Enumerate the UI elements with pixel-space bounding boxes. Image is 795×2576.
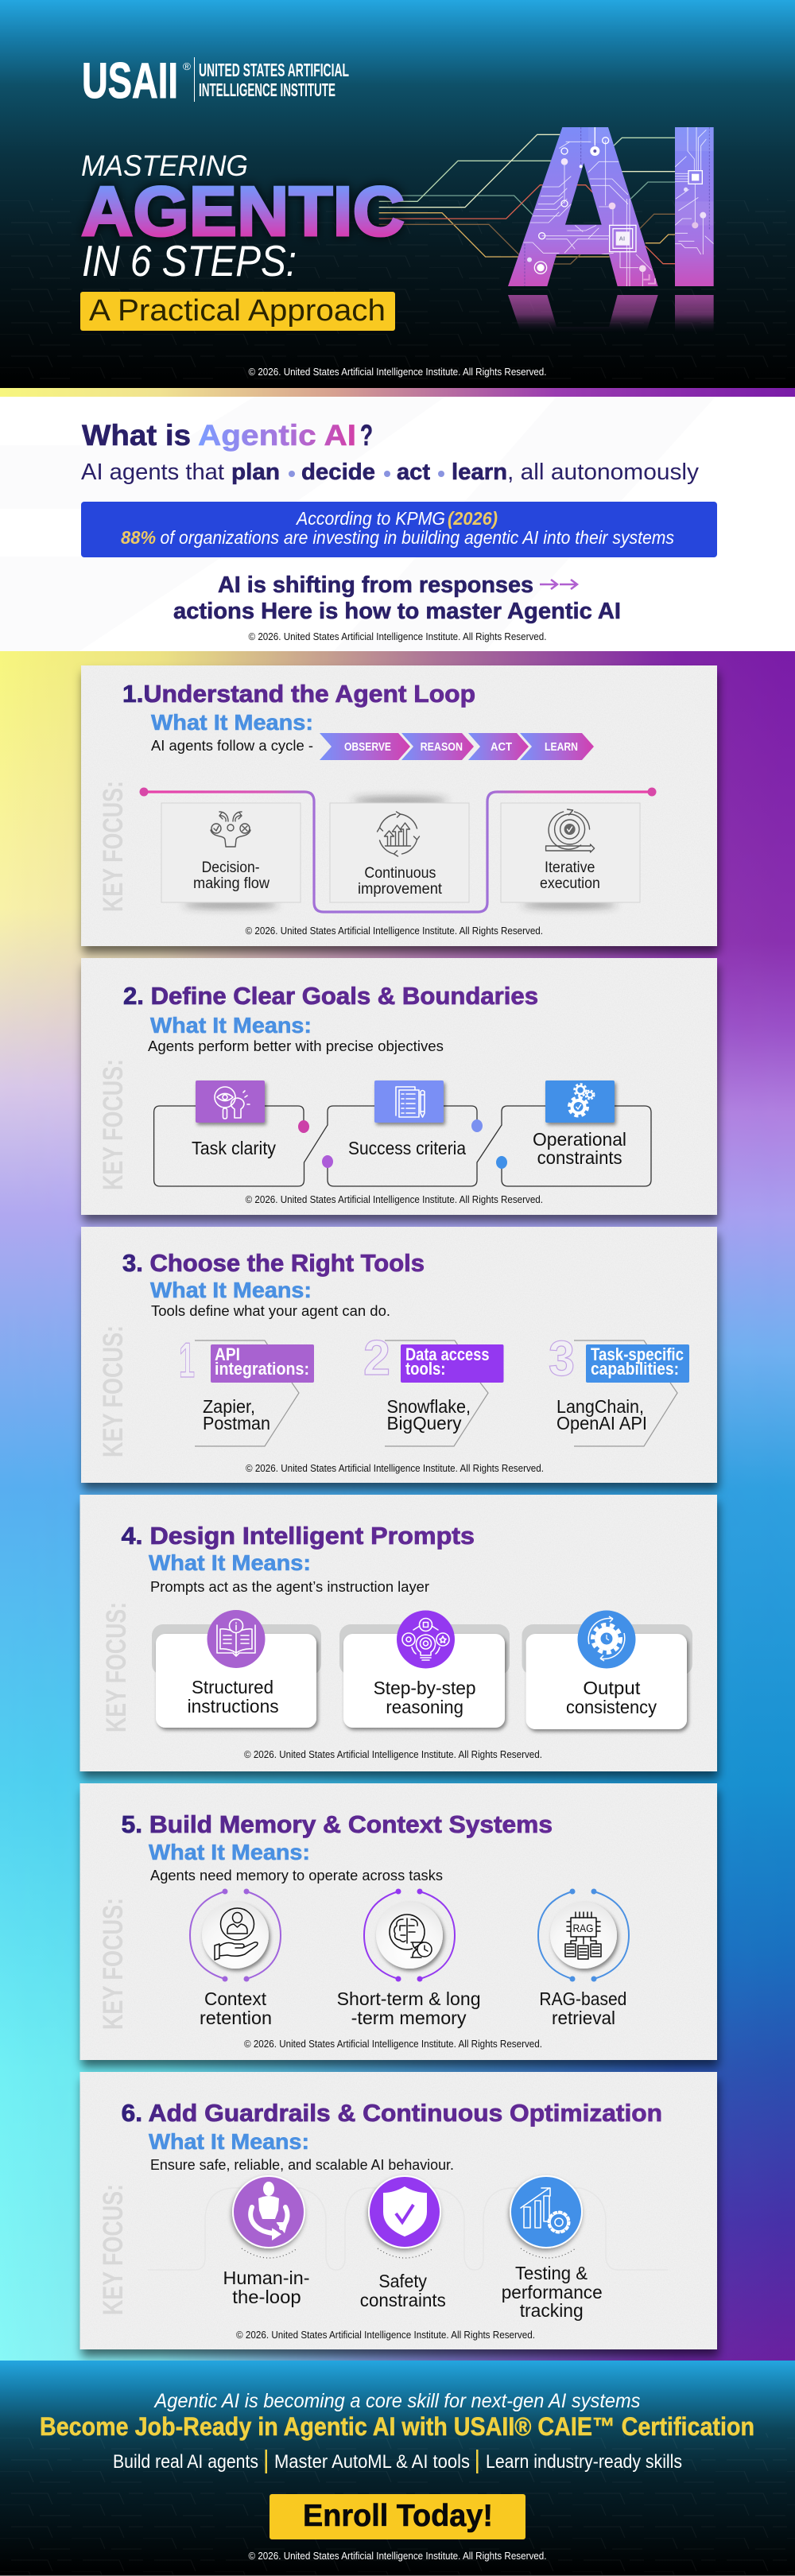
examples <box>203 1396 270 1433</box>
chevron sequence: ACT <box>491 741 512 754</box>
label <box>533 1129 626 1168</box>
chevron sequence: REASON <box>421 741 463 754</box>
heading box: Task-specific <box>591 1344 684 1364</box>
copyright: © 2026. United States Artificial Intelligence Institute. All Rights Reserved. <box>248 631 547 642</box>
hero background <box>0 0 795 388</box>
key focus vertical label: KEY FOCUS: <box>98 781 129 912</box>
reflection of AI letters <box>508 295 714 328</box>
heading: 6. Add Guardrails & Continuous Optimization <box>122 2099 662 2127</box>
faint outline humps <box>148 2188 668 2270</box>
text: IN 6 STEPS: IN 6 STEPS: <box>82 236 297 285</box>
hero banner <box>0 0 795 378</box>
icon: shield with check <box>383 2186 427 2237</box>
item: RAG-based retrieval: RAG <box>572 1922 593 1934</box>
KPMG statistic box: of organizations are investing in building agentic AI into their systems <box>161 527 674 548</box>
copyright: © 2026. United States Artificial Intelligence Institute. All Rights Reserved. <box>246 1463 544 1474</box>
label: consistency <box>566 1697 657 1717</box>
logo: USAII <box>82 53 349 109</box>
item: short-term and long-term memory <box>337 1889 481 2028</box>
label: Iterative <box>545 859 595 876</box>
heading: 2. Define Clear Goals & Boundaries <box>123 982 538 1010</box>
definition line: learn <box>452 460 507 485</box>
definition line: decide <box>301 460 375 485</box>
heading box <box>586 1344 689 1383</box>
icon: person with loop arrows <box>250 2182 288 2240</box>
heading box: integrations: <box>215 1359 309 1379</box>
icon: gears <box>569 1084 595 1116</box>
chevron sequence: LEARN <box>545 741 578 754</box>
footer call to action <box>0 2361 795 2576</box>
label: retrieval <box>552 2008 615 2028</box>
benefits row: Learn industry-ready skills <box>486 2451 682 2473</box>
chevron sequence <box>320 733 594 760</box>
footer background <box>0 2361 795 2575</box>
KPMG statistic box: (2026) <box>448 508 498 529</box>
what it means: What It Means: <box>149 1840 310 1864</box>
copyright: © 2026. United States Artificial Intelligence Institute. All Rights Reserved. <box>246 925 543 937</box>
card: operational constraints <box>533 1080 626 1168</box>
label: Structured <box>192 1677 273 1697</box>
label <box>358 865 443 898</box>
what it means: What It Means: <box>150 1013 312 1038</box>
label <box>223 2268 310 2307</box>
label <box>566 1678 657 1717</box>
panel: step 4 design intelligent prompts <box>80 1495 717 1771</box>
copyright: © 2026. United States Artificial Intelligence Institute. All Rights Reserved. <box>248 367 547 378</box>
label: making flow <box>193 875 270 892</box>
big circuit letters AI <box>508 127 714 286</box>
heading box: tools: <box>405 1359 445 1379</box>
label: reasoning <box>386 1697 463 1717</box>
connector line <box>140 787 657 912</box>
label <box>540 859 600 892</box>
copyright: © 2026. United States Artificial Intelligence Institute. All Rights Reserved. <box>236 2330 535 2341</box>
what it means: What It Means: <box>149 1550 311 1575</box>
label: Output <box>583 1678 641 1698</box>
definition line: , all autonomously <box>507 460 700 485</box>
ring arcs <box>364 1889 455 1981</box>
card: structured instructions <box>152 1610 321 1728</box>
text: MASTERING: MASTERING <box>81 149 248 182</box>
icon: RAG chip with documents <box>565 1912 601 1959</box>
panel: step 1 understand the agent loop <box>81 665 717 946</box>
icon: open book with info <box>217 1619 255 1656</box>
label <box>188 1677 279 1717</box>
icon: improvement cycle <box>377 812 420 856</box>
description: Agents perform better with precise objectives <box>148 1038 444 1054</box>
label <box>360 2271 446 2310</box>
benefits row <box>113 2450 682 2473</box>
section background <box>0 397 795 651</box>
heading: Agentic AI <box>198 419 356 452</box>
description: Prompts act as the agent’s instruction layer <box>150 1578 429 1595</box>
item: API integrations <box>179 1333 314 1446</box>
label: improvement <box>358 881 443 898</box>
examples: LangChain, <box>556 1396 644 1417</box>
key focus vertical label: KEY FOCUS: <box>98 1325 129 1457</box>
heading box: capabilities: <box>591 1359 679 1379</box>
shifting statement: actions Here is how to master Agentic AI <box>173 599 621 624</box>
label: Short-term & long <box>337 1988 481 2009</box>
item: testing and performance tracking <box>502 2176 603 2321</box>
key focus vertical label: KEY FOCUS: <box>98 1059 129 1190</box>
dotted arc <box>521 2248 576 2258</box>
big circuit letters AI: AI <box>619 235 625 242</box>
icon: brain with hourglass and clock <box>390 1915 432 1957</box>
key focus vertical label: KEY FOCUS: <box>98 2184 129 2315</box>
label: Task clarity <box>192 1138 276 1158</box>
description: Agents need memory to operate across tasks <box>150 1867 443 1884</box>
card: output consistency <box>522 1611 692 1729</box>
button: enroll today <box>270 2494 525 2539</box>
definition line: AI agents that <box>81 460 224 485</box>
item: human in the loop <box>223 2176 310 2307</box>
icon: checklist and pencil <box>396 1087 425 1117</box>
ring arcs <box>538 1889 629 1981</box>
outline arrow <box>195 1340 299 1446</box>
card: decision-making flow <box>161 803 301 902</box>
label: Decision- <box>202 859 260 876</box>
label <box>539 1988 626 2028</box>
logo: USAII: UNITED STATES ARTIFICIAL <box>199 60 349 80</box>
label: -term memory <box>351 2008 467 2028</box>
icon: chart with gear <box>521 2188 569 2233</box>
examples: BigQuery <box>386 1413 462 1433</box>
KPMG statistic box: According to KPMG <box>295 508 445 529</box>
examples: Zapier, <box>203 1396 255 1417</box>
panel: step 2 define clear goals and boundaries <box>81 958 717 1215</box>
KPMG statistic box: 88% <box>121 527 156 548</box>
chevron sequence: OBSERVE <box>344 741 391 754</box>
label: execution <box>540 875 600 892</box>
heading <box>82 419 373 452</box>
heading: What is <box>82 419 191 452</box>
panel: step 6 add guardrails and continuous optimization <box>80 2072 717 2349</box>
label: retention <box>200 2008 272 2028</box>
label: instructions <box>188 1696 279 1717</box>
label: Testing & <box>515 2263 588 2283</box>
label: performance <box>502 2282 603 2302</box>
definition line: plan <box>231 460 280 485</box>
copyright: © 2026. United States Artificial Intelligence Institute. All Rights Reserved. <box>246 1194 543 1205</box>
gradient strip <box>0 388 795 397</box>
examples: OpenAI API <box>556 1413 647 1433</box>
outline arrow <box>574 1340 677 1446</box>
card: step-by-step reasoning <box>339 1611 510 1728</box>
item: task-specific capabilities <box>549 1332 689 1446</box>
label: the-loop <box>232 2287 301 2307</box>
copyright: © 2026. United States Artificial Intelligence Institute. All Rights Reserved. <box>244 2039 542 2050</box>
heading: 3. Choose the Right Tools <box>122 1249 425 1277</box>
copyright: © 2026. United States Artificial Intelligence Institute. All Rights Reserved. <box>244 1749 542 1760</box>
label: tracking <box>520 2300 584 2321</box>
logo: USAII: USAII <box>82 53 178 109</box>
label: Step-by-step <box>374 1678 476 1698</box>
subtitle badge: A Practical Approach: A Practical Approach <box>89 294 386 328</box>
benefits row: Build real AI agents <box>113 2451 258 2473</box>
label: constraints <box>360 2290 446 2310</box>
panel: step 5 build memory and context systems <box>80 1783 717 2060</box>
item: context retention <box>190 1889 281 2028</box>
definition line: act <box>397 460 430 485</box>
heading box: Data access <box>405 1344 490 1364</box>
section: What is Agentic AI <box>0 397 795 651</box>
label: Human-in- <box>223 2268 310 2288</box>
circuit wires connecting AGENTIC to AI <box>379 134 675 264</box>
label: Continuous <box>364 865 436 882</box>
label <box>374 1678 476 1717</box>
label: RAG-based <box>539 1988 626 2009</box>
panel: step 3 choose the right tools <box>81 1227 717 1483</box>
icon: eye and bulb <box>215 1087 250 1119</box>
outline arrow <box>385 1340 488 1446</box>
label: Operational <box>533 1129 626 1150</box>
what it means: What It Means: <box>151 710 313 735</box>
icon: iterative target <box>546 809 595 852</box>
connector outlines <box>154 1106 651 1186</box>
definition line <box>81 460 700 485</box>
heading: 5. Build Memory & Context Systems <box>122 1810 553 1838</box>
item: data access tools <box>363 1331 504 1446</box>
label <box>200 1988 272 2028</box>
description: Ensure safe, reliable, and scalable AI behaviour. <box>150 2156 454 2173</box>
dotted arc <box>378 2248 433 2258</box>
gradient background for steps <box>0 651 795 2361</box>
number 1: 1 <box>179 1333 195 1388</box>
card: success criteria <box>348 1080 466 1158</box>
label: Context <box>204 1988 267 2009</box>
shifting statement: AI is shifting from responses <box>218 572 533 598</box>
examples: Postman <box>203 1413 270 1433</box>
label <box>193 859 270 892</box>
card: task clarity <box>192 1080 276 1158</box>
heading: ? <box>360 419 373 452</box>
ring arcs <box>190 1889 281 1981</box>
what it means: What It Means: <box>150 1278 312 1302</box>
heading box: API <box>215 1344 240 1364</box>
copyright: © 2026. United States Artificial Intelligence Institute. All Rights Reserved. <box>248 2551 547 2562</box>
item: RAG-based retrieval <box>538 1889 629 2028</box>
connector dots <box>298 1119 507 1169</box>
key focus vertical label: KEY FOCUS: <box>98 1898 129 2030</box>
button: enroll today: Enroll Today! <box>303 2499 493 2533</box>
logo: USAII: INTELLIGENCE INSTITUTE <box>199 80 335 100</box>
icon: person in hand <box>215 1908 258 1960</box>
text: AGENTIC: AGENTIC <box>81 172 405 250</box>
label <box>337 1988 481 2028</box>
key focus vertical label: KEY FOCUS: <box>101 1602 132 1732</box>
label <box>502 2263 603 2321</box>
card: iterative execution <box>501 803 640 902</box>
number 3: 3 <box>549 1332 575 1387</box>
label: Safety <box>378 2271 427 2291</box>
logo: USAII: ® <box>183 60 191 72</box>
dotted arc <box>242 2248 297 2258</box>
card: continuous improvement <box>330 803 469 902</box>
examples <box>556 1396 647 1433</box>
benefits row: Master AutoML & AI tools <box>274 2451 470 2473</box>
what it means: What It Means: <box>149 2129 309 2154</box>
heading: 1.Understand the Agent Loop <box>122 680 475 708</box>
description: AI agents follow a cycle - <box>151 737 313 754</box>
label: constraints <box>537 1147 622 1168</box>
icon: bulb with nodes <box>402 1619 449 1660</box>
examples <box>386 1396 471 1433</box>
KPMG statistic box <box>81 502 717 557</box>
shifting statement <box>173 572 621 624</box>
description: Tools define what your agent can do. <box>151 1302 390 1319</box>
heading box <box>211 1344 314 1383</box>
box shadows <box>183 797 617 908</box>
tagline: Agentic AI is becoming a core skill for next-gen AI systems <box>153 2390 640 2412</box>
icon: gear with clock <box>588 1616 625 1661</box>
examples: Snowflake, <box>386 1396 471 1417</box>
heading box <box>401 1344 504 1383</box>
heading: 4. Design Intelligent Prompts <box>122 1522 475 1550</box>
number 2: 2 <box>363 1331 390 1386</box>
label: Success criteria <box>348 1138 466 1158</box>
icon: decision flow <box>211 812 250 847</box>
item: safety constraints <box>360 2176 446 2310</box>
